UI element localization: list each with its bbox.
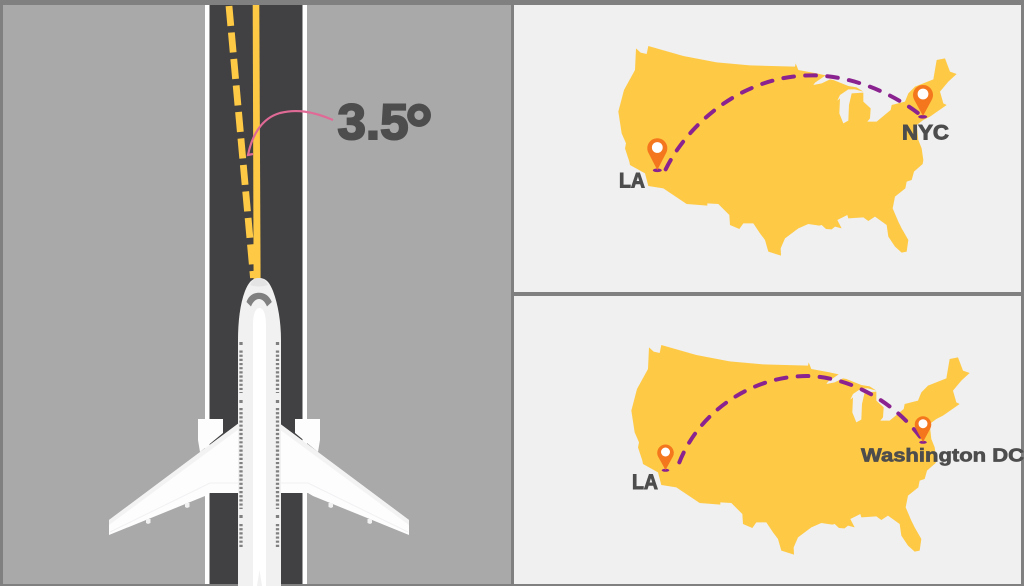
angle callout curve <box>248 111 333 155</box>
right cabin windows <box>276 342 279 547</box>
runway <box>205 5 307 584</box>
label: NYC: NYC <box>902 121 949 144</box>
left cabin windows <box>239 342 243 547</box>
panel: LA to Washington DC <box>514 296 1024 584</box>
panel: LA to NYC <box>514 5 1021 292</box>
panel: runway and plane <box>3 5 511 586</box>
label: LA: LA <box>619 170 645 193</box>
cockpit windows <box>246 293 272 306</box>
pin: LA <box>647 138 667 172</box>
airplane <box>109 278 409 586</box>
map of the USA <box>618 46 957 256</box>
right wing <box>279 419 409 535</box>
flight path LA to NYC <box>666 75 923 169</box>
angle label: 3.5 <box>338 94 408 150</box>
fuselage highlight <box>253 308 266 586</box>
pin: Washington DC <box>915 416 931 444</box>
deviated dashed path <box>229 6 254 278</box>
label: LA: LA <box>632 471 658 494</box>
pin: LA <box>657 445 674 472</box>
nose tip <box>250 278 268 286</box>
angle label: ° <box>405 90 433 168</box>
runway centre line <box>253 5 261 282</box>
label: Washington DC: Washington DC <box>861 445 1024 466</box>
left wing <box>109 419 239 535</box>
angle label <box>338 90 433 168</box>
pin: NYC <box>913 85 933 119</box>
flight path LA to Washington DC <box>679 376 920 462</box>
fuselage <box>238 278 281 586</box>
map of the USA <box>631 345 970 555</box>
